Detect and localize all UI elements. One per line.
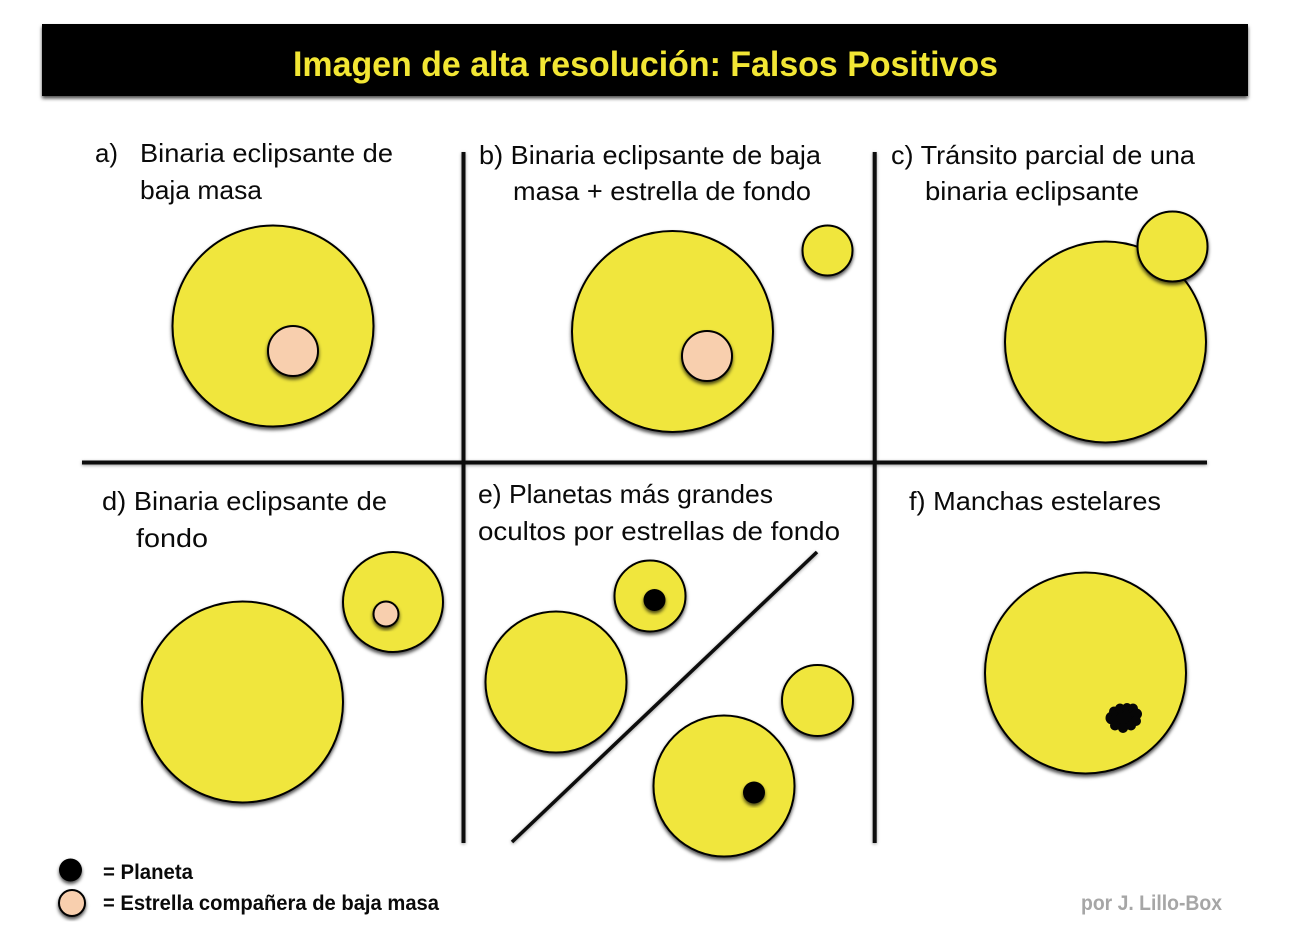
legend companion label: = Estrella compañera de baja masa bbox=[103, 892, 439, 915]
planet e4 bbox=[743, 782, 765, 804]
heading d: fondo bbox=[136, 523, 208, 553]
star e4 with planet bbox=[654, 716, 794, 856]
star e1 bbox=[486, 612, 626, 752]
heading b: b) Binaria eclipsante de baja bbox=[479, 140, 822, 170]
companion a bbox=[268, 326, 318, 376]
heading d: d) Binaria eclipsante de bbox=[102, 486, 387, 516]
starspot cluster bbox=[1106, 703, 1142, 733]
background binary d bbox=[343, 552, 443, 652]
star a bbox=[172, 226, 374, 426]
heading e: e) Planetas más grandes bbox=[478, 479, 773, 509]
panel c: partial transit bbox=[891, 140, 1208, 442]
title: Imagen de alta resolución: Falsos Positivos bbox=[293, 45, 998, 84]
companion c bbox=[1138, 212, 1208, 282]
companion d bbox=[374, 602, 398, 626]
background star b bbox=[802, 226, 852, 276]
companion b bbox=[682, 331, 732, 381]
panel d: background eclipsing binary bbox=[102, 486, 443, 802]
credit: por J. Lillo-Box bbox=[1081, 892, 1222, 915]
heading c: binaria eclipsante bbox=[925, 176, 1139, 206]
panel a: low-mass eclipsing binary bbox=[95, 138, 393, 426]
diagonal separator bbox=[512, 552, 817, 842]
legend companion icon bbox=[59, 890, 85, 916]
heading e: ocultos por estrellas de fondo bbox=[478, 516, 840, 546]
grid dividers bbox=[82, 152, 1207, 843]
panel f: starspots bbox=[909, 486, 1186, 774]
legend planet icon bbox=[59, 858, 82, 882]
panel b: low-mass eclipsing binary plus background star bbox=[479, 140, 852, 432]
heading b: masa + estrella de fondo bbox=[513, 176, 811, 206]
heading a: a) bbox=[95, 138, 118, 168]
legend bbox=[59, 858, 439, 916]
heading c: c) Tránsito parcial de una bbox=[891, 140, 1196, 170]
heading a: baja masa bbox=[140, 175, 263, 205]
title banner bbox=[42, 24, 1248, 96]
star b bbox=[572, 231, 773, 432]
star f bbox=[985, 572, 1186, 774]
legend planet label: = Planeta bbox=[103, 861, 193, 884]
panel e: larger planets hidden by background stars bbox=[478, 479, 853, 856]
star e3 bbox=[782, 665, 853, 736]
planet e2 bbox=[644, 589, 666, 611]
star e2 with planet bbox=[614, 560, 686, 632]
star d bbox=[142, 602, 343, 802]
heading a: Binaria eclipsante de bbox=[140, 138, 393, 168]
heading f: f) Manchas estelares bbox=[909, 486, 1161, 516]
star c bbox=[1005, 242, 1206, 442]
